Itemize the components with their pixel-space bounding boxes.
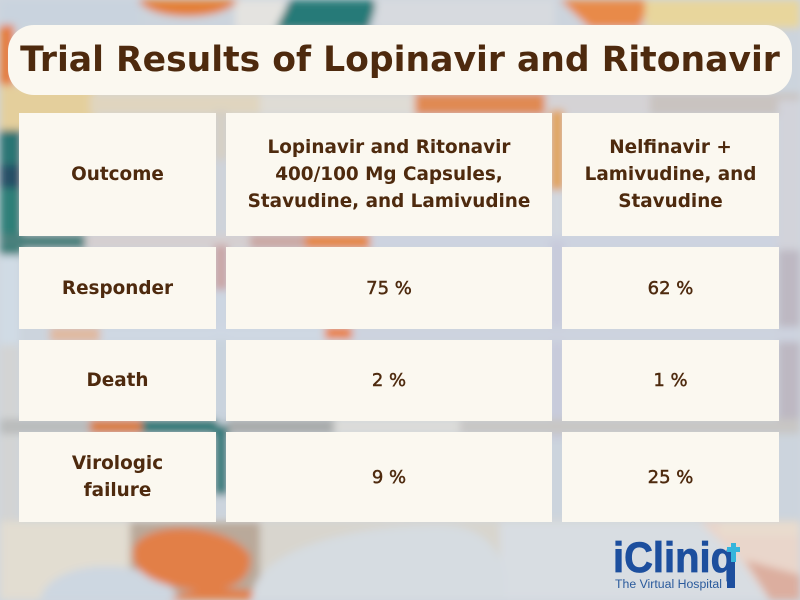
header cell: Nelfinavir regimen: Lamivudine, and [585, 164, 756, 185]
logo: iCliniq: The Virtual Hospital [615, 579, 722, 591]
header cell: Nelfinavir regimen: Nelfinavir + [609, 137, 732, 158]
value: Death nelfinavir: 1 % [653, 370, 688, 391]
value: Death lopinavir [226, 340, 552, 421]
row label: Virologic failure: Virologic [72, 453, 163, 474]
row label: Virologic failure [19, 432, 216, 522]
row label: Virologic failure: failure [84, 480, 151, 501]
value: Responder nelfinavir [562, 247, 779, 329]
value: Virologic failure lopinavir [226, 432, 552, 522]
value: Responder lopinavir [226, 247, 552, 329]
header cell: Outcome [19, 113, 216, 236]
value: Death lopinavir: 2 % [372, 370, 406, 391]
value: Virologic failure nelfinavir: 25 % [648, 466, 693, 488]
title banner [8, 25, 792, 95]
row label: Responder [19, 247, 216, 329]
value: Responder nelfinavir: 62 % [648, 278, 693, 298]
header cell: Lopinavir and Ritonavir regimen: 400/100 Mg Capsules, [275, 164, 503, 185]
value: Responder lopinavir: 75 % [366, 278, 412, 298]
header cell: Lopinavir and Ritonavir regimen: Lopinavir and Ritonavir [268, 137, 510, 158]
header cell: Nelfinavir regimen: Stavudine [618, 191, 723, 212]
header cell: Outcome: Outcome [71, 164, 164, 185]
row label: Death: Death [86, 370, 149, 391]
row label: Responder: Responder [62, 278, 173, 298]
value: Virologic failure nelfinavir [562, 432, 779, 522]
header cell: Nelfinavir regimen [562, 113, 779, 236]
value: Virologic failure lopinavir: 9 % [372, 466, 406, 488]
row label: Death [19, 340, 216, 421]
value: Death nelfinavir [562, 340, 779, 421]
header cell: Lopinavir and Ritonavir regimen [226, 113, 552, 236]
header cell: Lopinavir and Ritonavir regimen: Stavudine, and Lamivudine [248, 191, 530, 212]
title banner: Trial Results of Lopinavir and Ritonavir [20, 40, 780, 80]
